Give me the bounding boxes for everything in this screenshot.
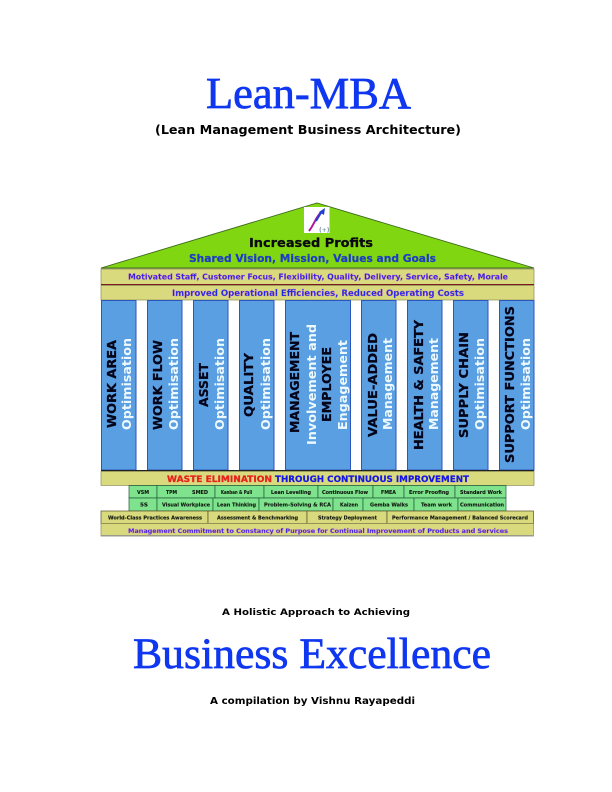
pillar: asset: ASSET [197, 362, 211, 407]
band: waste elimination: WASTE ELIMINATION [167, 475, 272, 485]
pillar: management and employee: MANAGEMENT [288, 331, 302, 433]
tools row one: Standard Work [460, 490, 502, 496]
pillar: support functions: SUPPORT FUNCTIONS [503, 306, 517, 463]
tools row two: Team work [421, 502, 452, 508]
band: waste elimination: THROUGH CONTINUOUS IMPROVEMENT [275, 475, 469, 485]
band: operational efficiencies: Improved Operational Efficiencies, Reduced Operating Costs [172, 289, 464, 299]
tools row two [129, 498, 506, 511]
tools row two: 5S [140, 502, 148, 508]
practices row: World-Class Practices Awareness [108, 516, 203, 522]
band: motivated staff [101, 269, 534, 284]
title: Lean-MBA [206, 69, 411, 118]
heading: business excellence: Business Excellence [133, 631, 491, 678]
pillar: support functions: Optimisation [519, 338, 533, 430]
pillar: value-added: VALUE-ADDED [366, 333, 380, 437]
band: operational efficiencies [101, 284, 534, 300]
subtitle: (Lean Management Business Architecture) [155, 123, 461, 137]
tools row one: FMEA [381, 490, 397, 496]
tagline: A Holistic Approach to Achieving [222, 607, 410, 618]
tools row one: Lean Levelling [271, 490, 311, 496]
tools row one: Kanban & Pull [221, 490, 252, 496]
roof heading: increased profits: Increased Profits [249, 235, 373, 250]
credit: A compilation by Vishnu Rayapeddi [210, 696, 415, 707]
pillar: work area [102, 300, 136, 470]
band: management commitment: Management Commitment to Constancy of Purpose for Continual Improvement of Products and Services [128, 528, 508, 535]
practices row: Performance Management / Balanced Scorecard [392, 516, 528, 522]
pillar: work area: WORK AREA [105, 339, 119, 428]
pillar: supply chain: SUPPLY CHAIN [457, 332, 471, 438]
house diagram [101, 203, 534, 536]
pillar: supply chain [454, 300, 488, 470]
pillar: management and employee: Engagement [336, 340, 350, 430]
tools row one [129, 486, 506, 498]
tools row two: Problem-Solving & RCA [264, 502, 332, 508]
pillar: management and employee: Involvement and [305, 324, 319, 445]
roof [101, 203, 534, 268]
practices row [101, 511, 534, 524]
pillar: work area: Optimisation [120, 338, 134, 430]
icon: rising arrow chart [304, 207, 330, 234]
tools row one: Continuous Flow [322, 490, 368, 496]
roof subheading: shared vision: Shared Vision, Mission, Values and Goals [189, 252, 436, 265]
tools row two: Lean Thinking [217, 502, 256, 508]
tools row one: SMED [192, 490, 208, 496]
pillar: work flow: Optimisation [167, 338, 181, 430]
pillar: health and safety [408, 300, 442, 470]
practices row: Strategy Deployment [318, 516, 377, 522]
tools row one: Error Proofing [409, 490, 449, 496]
pillar: quality [240, 300, 274, 470]
pillar: management and employee: EMPLOYEE [320, 347, 334, 422]
pillar: work flow [148, 300, 182, 470]
tools row two: Visual Workplace [162, 502, 210, 508]
pillar: quality: QUALITY [242, 353, 256, 417]
icon: rising arrow chart: (+) [319, 227, 330, 234]
band: management commitment [101, 524, 534, 536]
pillar: quality: Optimisation [259, 338, 273, 430]
band: waste elimination [101, 470, 534, 485]
pillar: asset: Optimisation [213, 338, 227, 430]
tools row two: Kaizen [340, 502, 358, 508]
pillar: supply chain: Optimisation [473, 338, 487, 430]
practices row: Assessment & Benchmarking [217, 516, 298, 522]
pillar: management and employee [286, 300, 350, 470]
pillar: support functions [500, 300, 534, 470]
tools row one: TPM [166, 490, 177, 496]
pillar: value-added: Management [381, 338, 395, 430]
pillar: value-added [362, 300, 396, 470]
pillar: work flow: WORK FLOW [151, 340, 165, 430]
pillar: asset [194, 300, 228, 470]
pillar: health and safety: HEALTH & SAFETY [412, 320, 426, 450]
band: motivated staff: Motivated Staff, Customer Focus, Flexibility, Quality, Delivery, Service, Safety, Morale [128, 272, 508, 282]
pillar: health and safety: Management [427, 338, 441, 430]
tools row two: Gemba Walks [370, 502, 409, 508]
tools row one: VSM [137, 490, 149, 496]
tools row two: Communication [460, 502, 504, 508]
